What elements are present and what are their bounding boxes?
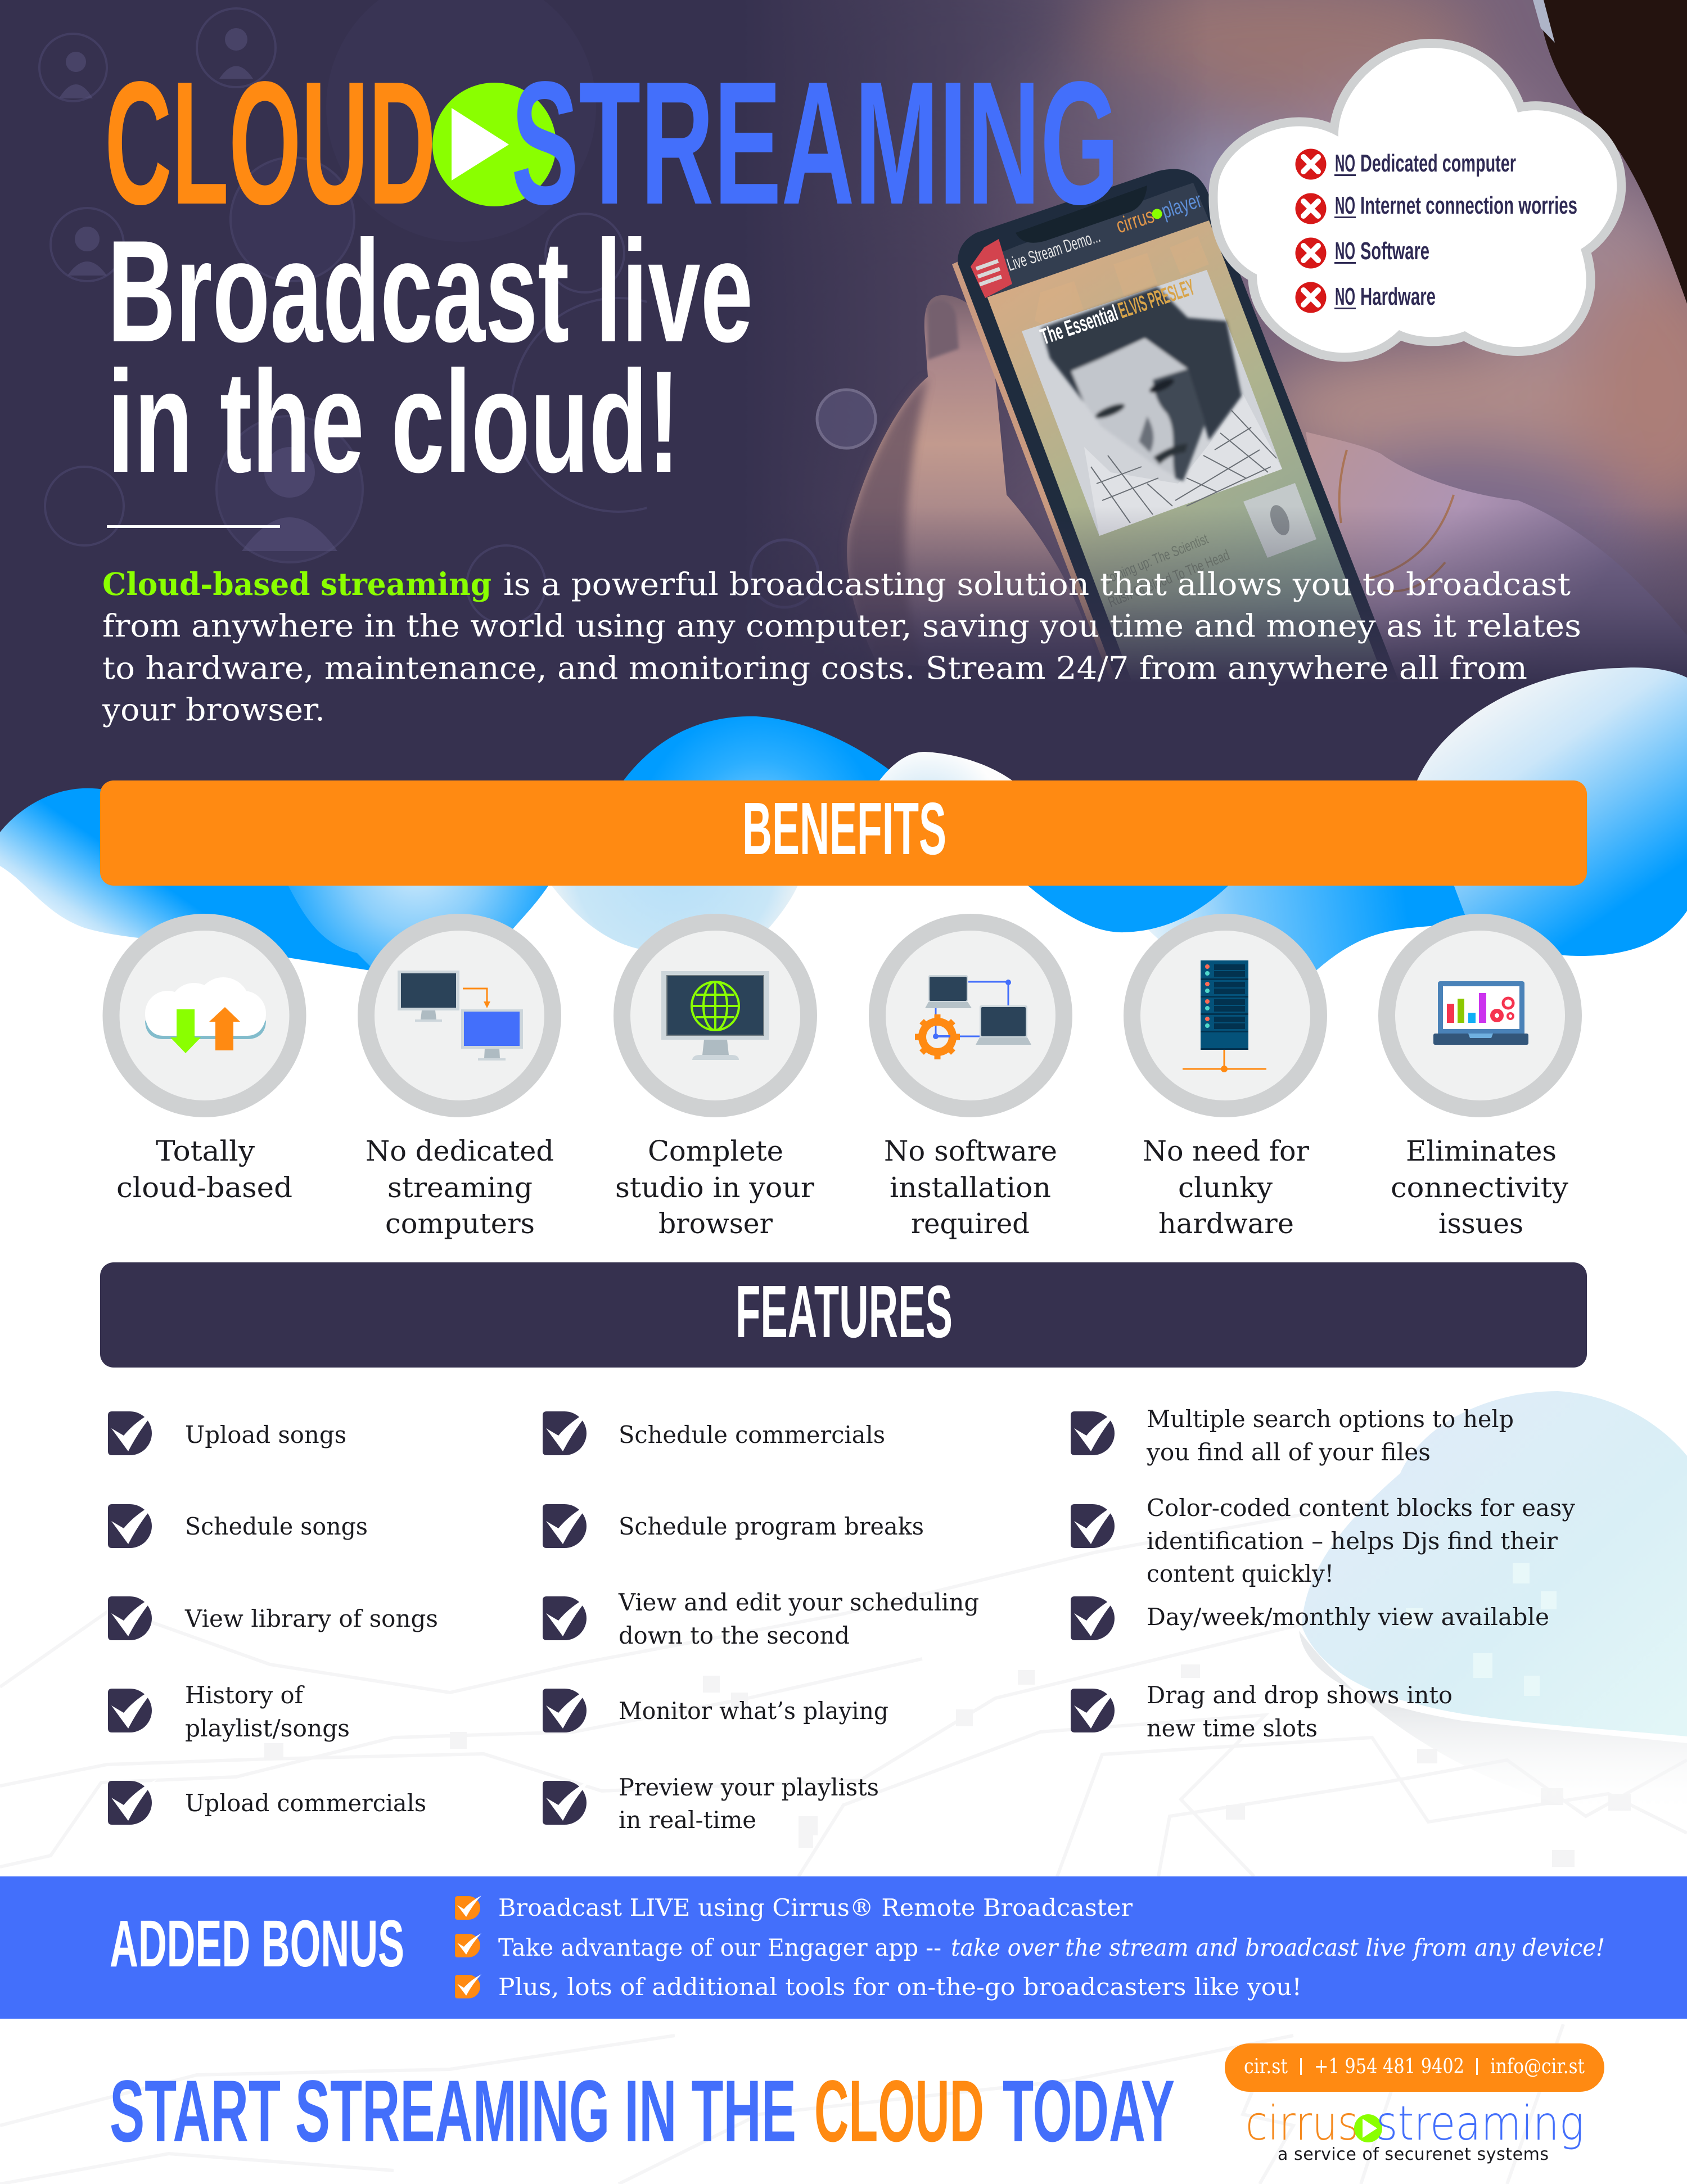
item: no hardware: NO [1335,283,1355,310]
circuit board pattern [0,1496,1687,2184]
item: no hardware [1296,282,1436,313]
feature: drag and drop [1071,1681,1453,1742]
phone [952,169,1399,680]
item: no software: NO [1335,237,1355,265]
headline: in the cloud! [107,340,680,503]
item: no software [1296,237,1429,269]
logo: cirrus streaming: cirrus [1246,2096,1359,2151]
item: no dedicated computer: Dedicated computer [1360,150,1516,177]
benefit: no software installation required [869,914,1072,1240]
divider [107,525,280,528]
album title: The Essential [1038,301,1121,350]
label: Complete [648,1135,783,1167]
logo: cirrus streaming: a service of securenet systems [1278,2145,1549,2164]
feature: color-coded content blocks: identification – helps Djs find their [1147,1527,1558,1555]
icon: cloud with arrows [145,977,266,1053]
feature: view and edit scheduling: down to the second [619,1622,850,1649]
CLOUD: CLOUD [105,46,436,241]
panel: added bonus [0,1876,1687,2019]
item: no internet connection worries: Internet connection worries [1360,192,1577,219]
label: required [911,1207,1030,1240]
cloud: blue hump [619,716,911,787]
label: Eliminates [1406,1135,1557,1167]
icon: gear [915,1014,960,1059]
feature: color-coded content blocks: Color-coded content blocks for easy [1147,1494,1575,1522]
feature: upload commercials [108,1779,426,1825]
headline: Broadcast live [107,210,753,372]
feature: view and edit scheduling: View and edit your scheduling [618,1589,979,1616]
icon: laptops and gear [915,975,1031,1059]
hero background [0,0,1687,843]
feature: history of playlist/songs: History of [185,1681,305,1709]
feature: schedule program breaks [543,1502,924,1548]
icon: server rack [1183,960,1266,1072]
bonus item 2 [455,1933,1605,1961]
item: no internet connection worries [1296,192,1577,224]
phone screen [985,220,1384,680]
intro paragraph [102,566,1581,728]
feature: upload songs: Upload songs [185,1421,346,1449]
intro paragraph: from anywhere in the world using any computer, saving you time and money as it relates [102,608,1581,644]
label: connectivity [1391,1171,1569,1204]
label: No software [884,1135,1057,1167]
feature: upload songs [108,1410,346,1455]
label [615,1135,814,1240]
label: issues [1438,1207,1523,1240]
heading: ADDED BONUS [110,1907,404,1981]
up-next text: Rush Of Blood To The Head [1106,547,1232,611]
features banner: FEATURES [736,1270,953,1353]
feature: view library of songs: View library of songs [184,1605,438,1632]
header text: Live Stream Demo... [1004,225,1103,275]
label: clunky [1178,1171,1273,1204]
item: no software: Software [1360,237,1429,265]
label: hardware [1158,1207,1294,1240]
user silhouettes [59,28,337,551]
portrait [1041,287,1242,481]
contact pill [1225,2043,1604,2092]
call to action: START STREAMING IN THE [110,2063,796,2160]
feature: drag and drop: Drag and drop shows into [1147,1681,1453,1709]
intro paragraph: to hardware, maintenance, and monitoring costs. Stream 24/7 from anywhere all from [102,650,1527,686]
play icon [432,83,556,206]
label: browser [658,1207,773,1240]
feature: view library of songs [108,1595,438,1640]
feature: view and edit scheduling [543,1589,979,1649]
circuit nodes [264,1664,1631,1867]
features list: column 3 [1071,1405,1575,1742]
contact pill: cir.st [1244,2055,1288,2078]
benefit: eliminates connectivity issues [1378,914,1582,1240]
up-next thumbnail [1243,483,1316,558]
feature: monitor what's playing: Monitor what’s playing [619,1697,888,1725]
item: no internet connection worries: NO [1335,192,1355,219]
headline [107,210,753,503]
feature: history of playlist/songs: playlist/songs [185,1714,350,1742]
label: studio in your [615,1171,814,1204]
item: no dedicated computer: NO [1335,150,1355,177]
benefits banner: BENEFITS [742,787,946,870]
label [884,1135,1057,1240]
icon: logo play button [1354,2114,1382,2142]
feature: monitor what's playing [543,1687,888,1732]
cloud: solid blue lobe [1018,877,1237,932]
cloud: centre-left lobe [284,877,554,970]
album cover [1022,270,1282,536]
label: No need for [1143,1135,1309,1167]
bonus item 3: Plus, lots of additional tools for on-the-go broadcasters like you! [498,1973,1302,2001]
right hand [1306,432,1681,657]
label: Totally [156,1135,255,1167]
feature: multiple search options [1071,1405,1514,1466]
contact pill: +1 954 481 9402 [1314,2055,1464,2078]
player logo: cirrus [1113,204,1157,238]
phone frame [952,259,1122,680]
benefits banner [100,780,1587,886]
feature: preview playlists [543,1774,879,1834]
contact pill: info@cir.st [1490,2055,1585,2078]
screen hex pattern [1035,236,1209,332]
bonus item 1: Broadcast LIVE using Cirrus® Remote Broadcaster [498,1894,1133,1921]
feature: multiple search options: you find all of your files [1146,1438,1431,1466]
intro paragraph: your browser. [102,692,325,728]
icon: monitor with globe [661,971,769,1060]
benefit: complete studio in your browser [614,914,817,1240]
intro paragraph: is a powerful broadcasting solution that allows you to broadcast [503,566,1571,602]
bonus item 2: Take advantage of our Engager app -- [498,1934,941,1961]
features list: column 2 [543,1410,979,1834]
icon: two monitors [398,971,523,1061]
label: computers [385,1207,535,1240]
benefit: no dedicated streaming computers [358,914,561,1240]
feature: preview playlists: Preview your playlists [619,1774,879,1801]
portrait face [1071,339,1205,481]
bonus item 2: take over the stream and broadcast live from any device! [951,1934,1605,1961]
call to action: CLOUD [814,2063,984,2160]
cloud: left [0,788,394,971]
feature: preview playlists: in real-time [619,1806,756,1834]
features list: column 1 [108,1410,438,1825]
cloud: right [1414,667,1687,956]
label [1143,1135,1309,1240]
cloud outline [1217,48,1617,353]
item: no dedicated computer [1296,148,1516,180]
feature: schedule commercials [543,1410,885,1455]
feature: history of playlist/songs [108,1681,350,1742]
feature: schedule songs: Schedule songs [185,1513,368,1540]
photo: hand holding phone [647,0,1687,675]
callout: no requirements cloud [1217,48,1617,353]
photo fade bottom [731,506,1687,843]
title [105,46,1119,241]
logo: cirrus streaming [1246,2096,1584,2164]
STREAMING: STREAMING [511,46,1119,241]
menu button [971,239,1012,298]
blurred photo background [809,0,1687,659]
icon: laptop with chart [1433,981,1528,1045]
player logo: player [1159,188,1205,223]
features banner [100,1262,1587,1368]
player logo [1113,188,1205,238]
label [116,1135,292,1204]
cloud: lower right lobe [1142,877,1468,1012]
cloud: pale centre lobe [545,877,801,950]
label: No dedicated [366,1135,554,1167]
album cover: ELVIS PRESLEY [1115,275,1198,323]
benefit: no need for clunky hardware [1124,914,1327,1240]
cloud: pale blue lower right [1299,1391,1687,1833]
cloud: pale hump [874,752,1021,787]
background clouds [0,667,1687,1012]
benefit: totally cloud-based [102,914,306,1204]
feature: schedule songs [108,1502,368,1548]
app header [972,183,1209,298]
phone body [958,169,1399,680]
feature: color-coded content blocks [1071,1494,1575,1587]
logo: cirrus streaming: streaming [1376,2096,1584,2151]
portrait hair [1041,287,1242,440]
photo fade left [647,0,1172,665]
label: streaming [387,1171,533,1204]
item: no hardware: Hardware [1360,283,1436,310]
label [366,1135,554,1240]
feature: day/week/monthly view: Day/week/monthly view available [1147,1603,1549,1631]
feature: color-coded content blocks: content quickly! [1147,1560,1334,1587]
feature: upload commercials: Upload commercials [185,1789,426,1817]
feature: day/week/monthly view [1071,1595,1549,1640]
portrait shirt [1084,394,1282,536]
feature: multiple search options: Multiple search options to help [1147,1405,1514,1433]
call to action: TODAY [1003,2063,1175,2160]
label: installation [890,1171,1051,1204]
intro paragraph: Cloud-based streaming [102,566,491,602]
label [1391,1135,1569,1240]
label: cloud-based [116,1171,292,1204]
feature: drag and drop: new time slots [1147,1714,1318,1742]
dark hair at top right [1538,0,1687,304]
feature: schedule program breaks: Schedule program breaks [619,1513,924,1540]
decorative network rings [38,7,647,625]
network ring over photo [751,390,876,607]
up-next text: Coming up: The Scientist [1100,530,1211,588]
up-next text [1100,530,1232,611]
left hand [847,295,1102,675]
feature: schedule commercials: Schedule commercials [619,1421,885,1449]
